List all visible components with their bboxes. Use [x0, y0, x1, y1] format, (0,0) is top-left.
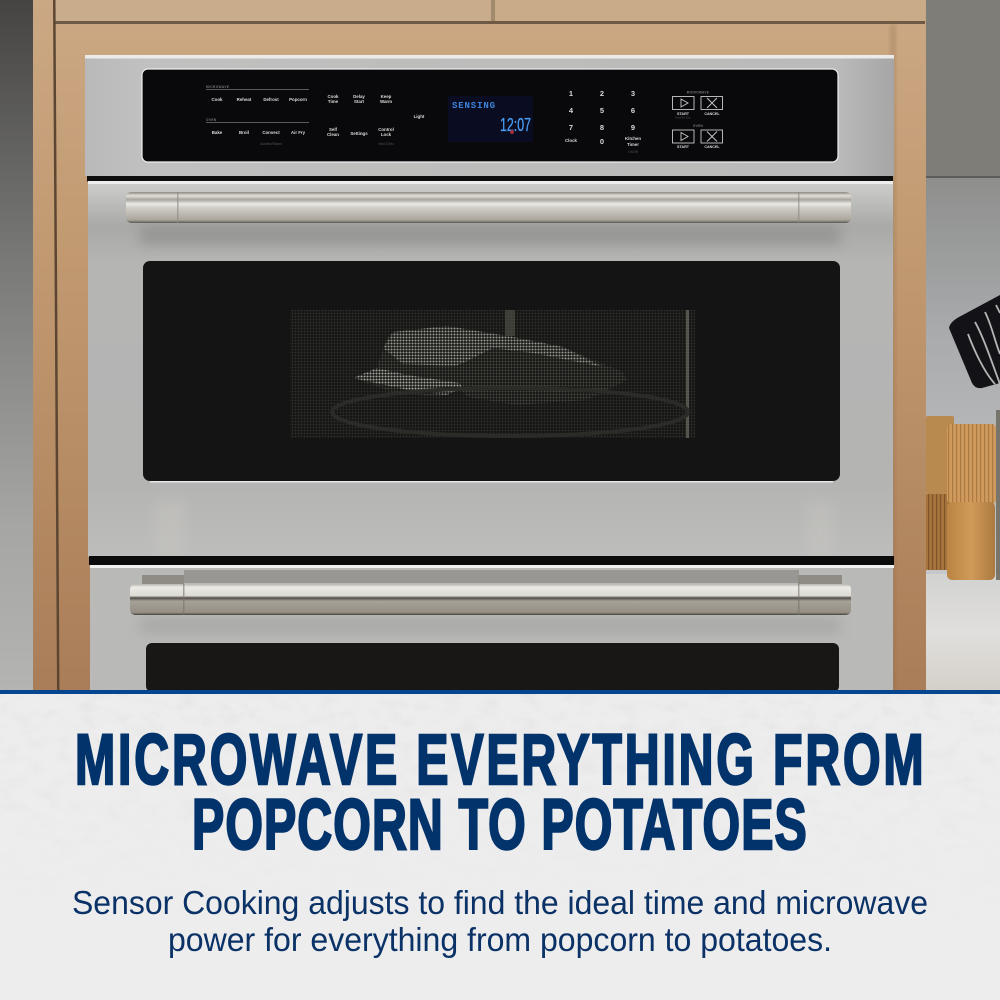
- start and cancel buttons: [672, 90, 722, 149]
- start and cancel buttons: CANCEL: [704, 112, 720, 116]
- microwave and oven keys: Popcorn: [289, 97, 307, 102]
- wooden grinders: [926, 410, 1000, 580]
- control panel housing: [85, 55, 894, 176]
- microwave and oven keys: Broil: [239, 130, 249, 135]
- display: 12:07: [500, 115, 531, 135]
- number pad: 4: [569, 106, 574, 115]
- start and cancel buttons: START: [677, 145, 690, 149]
- kitchen background: [0, 0, 1000, 692]
- blue divider: [0, 690, 1000, 694]
- number pad: Kitchen: [625, 136, 641, 141]
- text band: [0, 694, 1000, 1000]
- microwave and oven keys: Settings: [350, 131, 368, 136]
- microwave and oven keys: Self: [329, 127, 338, 132]
- start and cancel buttons: START: [677, 112, 690, 116]
- microwave and oven keys: Hold 3 Sec: [378, 142, 394, 146]
- heading: POPCORN TO POTATOES: [192, 784, 807, 864]
- microwave and oven keys: Reheat: [237, 97, 252, 102]
- number pad: 0: [600, 137, 604, 146]
- microwave and oven keys: Control: [378, 127, 394, 132]
- number pad: Clock: [565, 138, 578, 143]
- microwave and oven keys: Convect: [262, 130, 280, 135]
- food seen through mesh: [290, 310, 695, 438]
- number pad: 9: [631, 123, 635, 132]
- black glass panel: [142, 69, 838, 162]
- microwave and oven keys: Keep: [381, 94, 392, 99]
- whisk utensil: [949, 295, 1000, 388]
- display: SENSING: [452, 101, 495, 111]
- number pad: 7: [569, 123, 573, 132]
- start and cancel buttons: Add 30 Sec: [675, 116, 691, 120]
- microwave and oven keys: Cook: [328, 94, 339, 99]
- microwave and oven keys: Start: [354, 99, 365, 104]
- lower window: [146, 643, 839, 692]
- gap between panel and door: [87, 176, 893, 182]
- upper oven door: [88, 181, 893, 557]
- microwave and oven keys: OVEN: [206, 118, 217, 122]
- lower oven door: [90, 565, 894, 692]
- number pad: Timer: [627, 142, 639, 147]
- number pad: [565, 89, 641, 154]
- number pad: 3: [631, 89, 635, 98]
- microwave and oven keys: Lock: [381, 132, 392, 137]
- description: [72, 884, 928, 958]
- microwave and oven keys: Delay: [353, 94, 365, 99]
- microwave and oven keys: MICROWAVE: [206, 85, 229, 89]
- microwave and oven keys: Bake: [212, 130, 223, 135]
- number pad: 5: [600, 106, 604, 115]
- start and cancel buttons: OVEN: [693, 124, 704, 128]
- oven window: [143, 261, 840, 481]
- description: Sensor Cooking adjusts to find the ideal time and microwave: [72, 884, 928, 921]
- microwave and oven keys: [206, 85, 425, 146]
- display: [448, 96, 533, 142]
- gap between oven doors: [89, 556, 894, 565]
- microwave and oven keys: Air Fry: [291, 130, 306, 135]
- start and cancel buttons: MICROWAVE: [687, 90, 709, 94]
- lower door handle: [130, 584, 851, 615]
- heading: MICROWAVE EVERYTHING FROM: [75, 719, 924, 799]
- microwave and oven keys: Cook: [212, 97, 223, 102]
- microwave and oven keys: Time: [328, 99, 339, 104]
- microwave and oven keys: Autoflex/Steam: [260, 142, 282, 146]
- number pad: 1: [569, 89, 573, 98]
- microwave and oven keys: Warm: [380, 99, 392, 104]
- microwave and oven keys: Defrost: [263, 97, 279, 102]
- heading: [75, 719, 924, 864]
- number pad: 6: [631, 106, 635, 115]
- wood cabinet: [33, 0, 926, 692]
- description: power for everything from popcorn to potatoes.: [168, 921, 832, 958]
- microwave and oven keys: Clean: [327, 132, 339, 137]
- microwave and oven keys: Light: [414, 114, 425, 119]
- number pad: 2: [600, 89, 604, 98]
- door handle: [126, 192, 851, 223]
- start and cancel buttons: CANCEL: [704, 145, 720, 149]
- number pad: 8: [600, 123, 604, 132]
- number pad: On/Off: [628, 150, 638, 154]
